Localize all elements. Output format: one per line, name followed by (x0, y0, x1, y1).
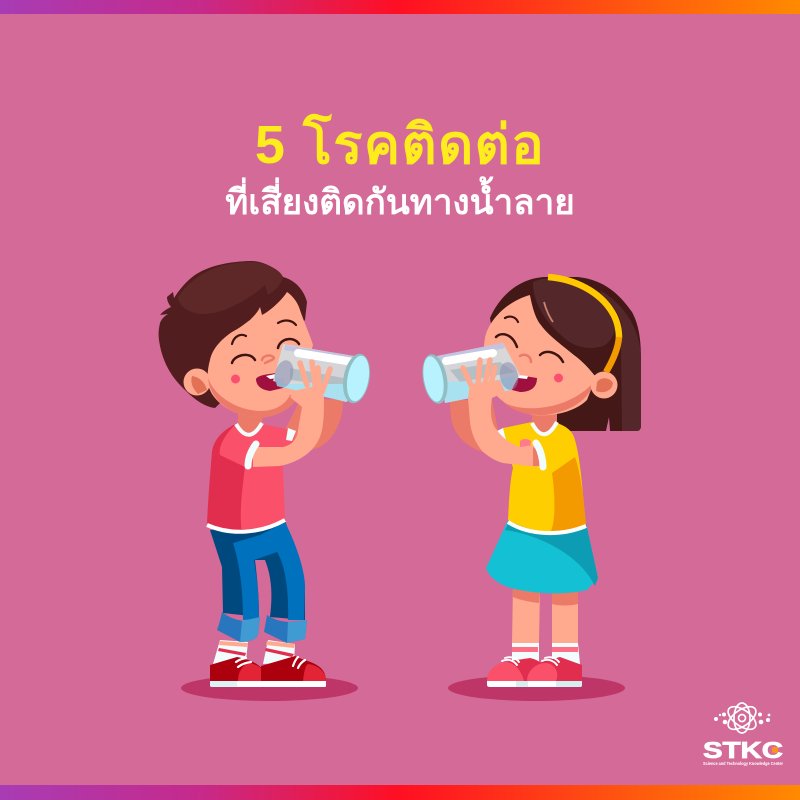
logo dots (714, 712, 770, 724)
girl figure (419, 277, 641, 701)
boy figure (159, 261, 374, 701)
boy face (208, 292, 313, 418)
logo: STKC (703, 702, 783, 766)
girl shirt (497, 422, 586, 533)
girl ear (590, 372, 618, 398)
logo tagline: Science and Technology Knowledge Center (703, 761, 783, 766)
girl fringe hair (530, 278, 622, 377)
girl front arm and hand (463, 360, 543, 467)
boy ear (184, 368, 210, 396)
boy ground shadow (181, 675, 358, 701)
top gradient bar (0, 0, 800, 14)
girl headband (548, 277, 619, 372)
logo atom mark (724, 702, 760, 734)
boy back arm (285, 399, 343, 454)
boy neck (238, 412, 263, 434)
logo wordmark: STKC (703, 737, 783, 763)
girl socks (512, 643, 580, 664)
boy hair (159, 261, 307, 408)
title: 5 โรคติดต่อ (255, 115, 545, 175)
boy glass of water (272, 344, 374, 405)
girl back arm (450, 400, 500, 452)
girl skirt (486, 520, 598, 593)
girl face (483, 295, 596, 415)
girl shoes (487, 657, 582, 687)
boy front arm and hand (248, 362, 330, 467)
girl neck (532, 412, 557, 433)
boy trousers (210, 520, 307, 643)
logo accent dot (772, 747, 778, 753)
boy shoes (210, 656, 326, 687)
girl back hair (490, 277, 641, 431)
girl ground shadow (448, 675, 625, 701)
girl legs (512, 585, 578, 643)
girl glass of water (419, 343, 520, 406)
subtitle: ที่เสี่ยงติดกันทางน้ำลาย (225, 183, 575, 222)
boy shirt (207, 423, 296, 533)
bottom gradient bar (0, 785, 800, 800)
boy socks and ankles (213, 640, 295, 664)
